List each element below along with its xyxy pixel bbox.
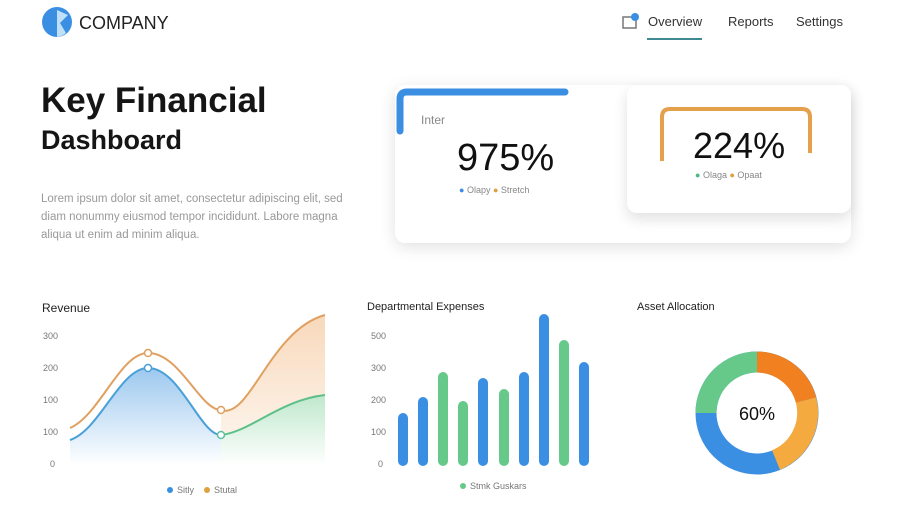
accent: blue bracket	[396, 88, 568, 134]
nav menu: Settings	[796, 14, 843, 29]
chart: asset allocation donut: Asset Allocation	[637, 301, 715, 313]
title: Dashboard	[41, 125, 182, 155]
chart: revenue	[42, 301, 326, 495]
chart: departmental expenses: 500	[371, 331, 386, 341]
chart: revenue: 300	[43, 331, 58, 341]
card: 224%: ● Olaga ● Opaat	[695, 170, 762, 180]
chart: asset allocation donut	[637, 301, 818, 474]
chart: asset allocation donut: 60%	[739, 404, 775, 424]
chart: revenue: 200	[43, 363, 58, 373]
chart: revenue: Revenue	[42, 301, 90, 315]
chart: departmental expenses: 0	[378, 459, 383, 469]
chart: departmental expenses: Departmental Expenses	[367, 301, 484, 313]
chart: departmental expenses: 300	[371, 363, 386, 373]
icon: logo	[42, 7, 72, 37]
label inter: Inter	[421, 113, 445, 127]
legend kpi1: ● Olapy ● Stretch	[459, 185, 529, 195]
nav menu	[622, 13, 843, 40]
chart: departmental expenses	[367, 301, 589, 491]
chart: revenue: Sitly	[177, 485, 195, 495]
icon: overview	[622, 13, 639, 29]
header logo	[42, 7, 169, 37]
chart: revenue: 0	[50, 459, 55, 469]
chart: departmental expenses: 100	[371, 427, 386, 437]
chart: revenue: Stutal	[214, 485, 237, 495]
company name: COMPANY	[79, 13, 169, 33]
chart: departmental expenses: 200	[371, 395, 386, 405]
description text: Lorem ipsum dolor sit amet, consectetur adipiscing elit, sed diam nonummy eiusmod tempor incididunt. Labore magna aliqua ut enim ad minim aliqua.	[41, 193, 343, 241]
chart: departmental expenses: Stmk Guskars	[470, 481, 527, 491]
chart: revenue: 100	[43, 395, 58, 405]
chart: revenue: 100	[43, 427, 58, 437]
panel: KPI cards	[395, 85, 851, 243]
nav menu: Overview	[648, 14, 702, 29]
card: 224%: 224%	[693, 125, 785, 166]
accent: orange bracket	[660, 107, 812, 161]
kpi value 975%: 975%	[457, 137, 554, 179]
card: 224%	[627, 85, 851, 213]
title: Key Financial	[41, 81, 267, 120]
nav menu: Reports	[728, 14, 774, 29]
title	[41, 81, 267, 155]
